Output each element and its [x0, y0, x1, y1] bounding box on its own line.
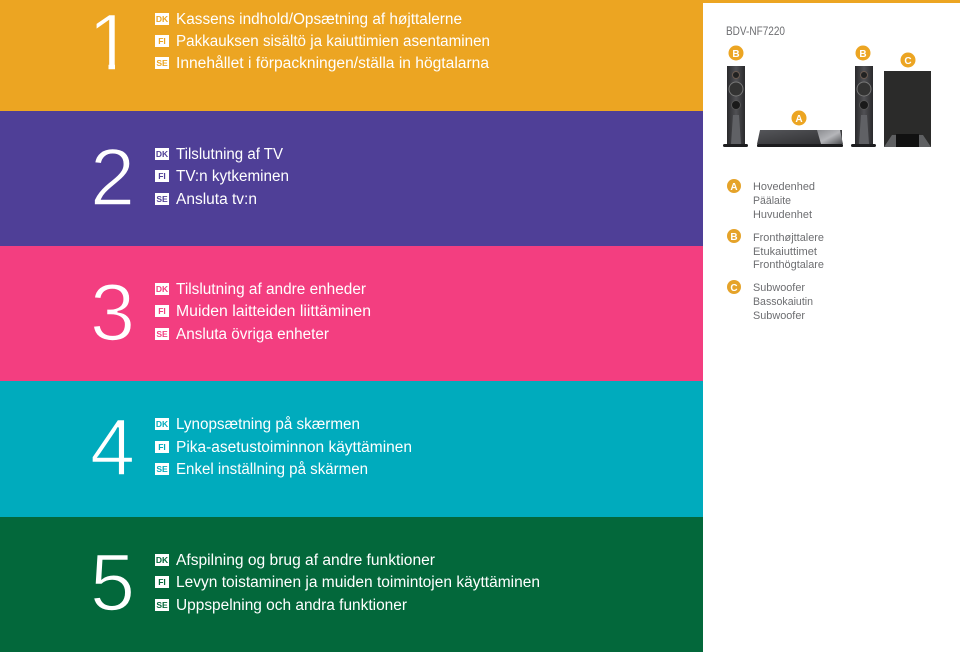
legend B: Etukaiuttimet [753, 246, 817, 258]
right speaker B [851, 46, 876, 147]
step 1 text block: Innehållet i förpackningen/ställa in högtalarna [176, 55, 489, 72]
legend A: Hovedenhed [753, 181, 815, 193]
step 4 text block [155, 416, 412, 478]
step 5 text block: FI [158, 577, 166, 587]
legend B: Fronthögtalare [753, 259, 824, 271]
legend B: Fronthøjttalere [753, 232, 824, 244]
step 2 text block: FI [158, 171, 166, 181]
step 1 text block [155, 11, 490, 72]
left speaker B: B [732, 49, 740, 60]
legend C: Subwoofer [753, 310, 805, 322]
top orange strip [703, 0, 960, 3]
panel: step 3 [0, 246, 703, 381]
number 1: 1 [88, 0, 133, 88]
step 3 text block: Ansluta övriga enheter [176, 326, 329, 343]
legend C [727, 280, 813, 322]
legend A [727, 179, 815, 221]
step 4 text block: Pika-asetustoiminnon käyttäminen [176, 439, 412, 456]
step 2 text block [155, 146, 289, 208]
product illustration [723, 46, 931, 147]
legend [727, 179, 824, 322]
step 4 text block: Lynopsætning på skærmen [176, 416, 360, 433]
left speaker B [723, 46, 748, 147]
step 3 text block: Muiden laitteiden liittäminen [176, 303, 371, 320]
legend C: Subwoofer [753, 282, 805, 294]
number 3: 3 [90, 268, 135, 358]
step 4 text block: DK [156, 419, 169, 429]
step 5 text block: DK [156, 555, 169, 565]
model name: BDV-NF7220 [726, 26, 785, 38]
step 5 text block: Afspilning og brug af andre funktioner [176, 552, 435, 569]
step 4 text block: FI [158, 442, 166, 452]
step 1 text block: FI [158, 36, 166, 46]
step 3 text block: SE [156, 329, 168, 339]
number 2: 2 [90, 133, 135, 223]
step 2 text block: TV:n kytkeminen [176, 168, 289, 185]
step 3 text block [155, 281, 371, 343]
panel: step 5 [0, 517, 703, 652]
step 4 text block: Enkel inställning på skärmen [176, 461, 368, 478]
step 1 text block: SE [156, 58, 168, 68]
main unit A [757, 110, 843, 147]
subwoofer C: C [904, 56, 912, 67]
step 2 text block: SE [156, 194, 168, 204]
step 1 text block: Pakkauksen sisältö ja kaiuttimien asentaminen [176, 33, 490, 50]
panel: step 2 [0, 111, 703, 246]
step 1 text block: Kassens indhold/Opsætning af højttalerne [176, 11, 462, 28]
step 3 text block: DK [156, 284, 169, 294]
step 1 text block: DK [156, 14, 169, 24]
step 3 text block: Tilslutning af andre enheder [176, 281, 366, 298]
legend C: C [730, 283, 738, 294]
step 5 text block: Levyn toistaminen ja muiden toimintojen käyttäminen [176, 574, 540, 591]
step 5 text block: Uppspelning och andra funktioner [176, 597, 407, 614]
step 2 text block: DK [156, 149, 169, 159]
step 4 text block: SE [156, 464, 168, 474]
step 5 text block [155, 552, 540, 614]
legend C: Bassokaiutin [753, 296, 813, 308]
number 4: 4 [90, 403, 135, 493]
step 3 text block: FI [158, 306, 166, 316]
subwoofer C [884, 52, 931, 147]
main unit A: A [795, 114, 803, 125]
right speaker B: B [859, 49, 867, 60]
step 2 text block: Tilslutning af TV [176, 146, 284, 163]
step 5 text block: SE [156, 600, 168, 610]
step 2 text block: Ansluta tv:n [176, 191, 257, 208]
legend A: Huvudenhet [753, 209, 812, 221]
legend B [727, 229, 824, 271]
panel: step 1 [0, 0, 703, 111]
legend A: A [730, 182, 738, 193]
legend B: B [730, 232, 738, 243]
number 5: 5 [90, 538, 135, 628]
legend A: Päälaite [753, 195, 791, 207]
panel: step 4 [0, 381, 703, 517]
